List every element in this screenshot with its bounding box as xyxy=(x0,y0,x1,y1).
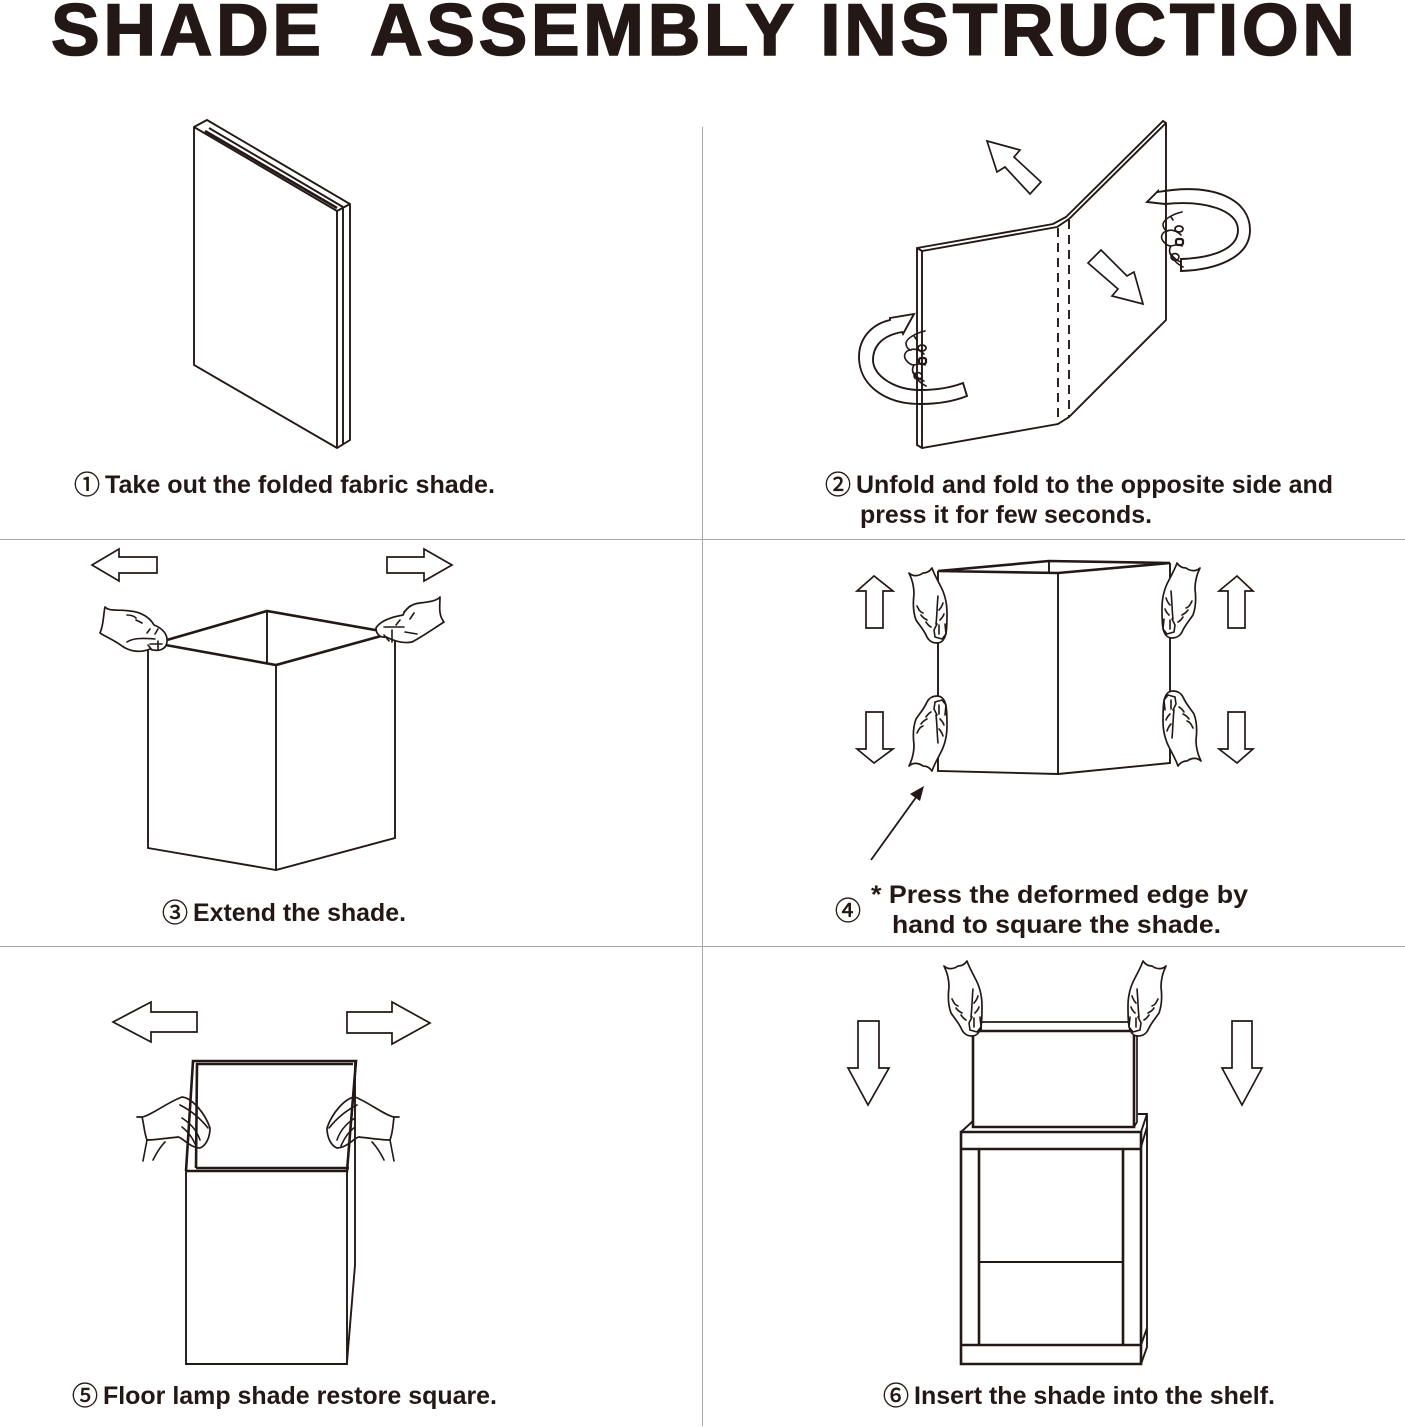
step 5 caption: ⑤ xyxy=(72,1376,98,1413)
icon: left hand xyxy=(100,607,167,651)
icon: extended shade box xyxy=(148,611,395,870)
step 1 caption xyxy=(74,465,495,502)
arrow: right xyxy=(347,1002,430,1044)
arrows: up and down xyxy=(857,576,1253,763)
step 2 caption: press it for few seconds. xyxy=(860,501,1152,529)
icon: two hands xyxy=(944,961,1166,1036)
step 6 caption: ⑥ xyxy=(883,1376,909,1413)
arrow: left xyxy=(113,1002,197,1042)
step 2 caption: Unfold and fold to the opposite side and xyxy=(856,471,1333,499)
icon: left hand xyxy=(137,1097,210,1161)
step 6 caption xyxy=(883,1376,1275,1413)
icon: shelf xyxy=(961,1114,1147,1364)
panel: step 6 xyxy=(848,961,1275,1413)
icon: fabric shade being inserted xyxy=(973,1022,1137,1127)
panel: step 1 xyxy=(74,120,495,502)
icon: right hand xyxy=(376,597,444,643)
icons: four hands xyxy=(909,563,1201,771)
icon: folded fabric shade xyxy=(194,120,350,448)
arrow: up-left xyxy=(987,141,1041,194)
step 3 caption: ③ xyxy=(162,893,188,930)
icon: left hand pinching xyxy=(905,331,926,386)
panel: step 3 xyxy=(92,549,452,930)
icon: unfolded shade panels xyxy=(917,121,1166,448)
panel: step 5 xyxy=(72,1002,497,1413)
step 4 caption: ④ xyxy=(835,891,861,928)
step 4 caption: * Press the deformed edge by xyxy=(871,881,1248,909)
step 5 caption: Floor lamp shade restore square. xyxy=(103,1382,497,1410)
arrow: pointing to deformed edge xyxy=(871,786,924,860)
step 1 caption: Take out the folded fabric shade. xyxy=(105,471,495,499)
icon: right hand pinching xyxy=(1162,212,1183,267)
step 3 caption xyxy=(162,893,406,930)
arrow: left down xyxy=(848,1021,889,1105)
icon: floor lamp shade xyxy=(186,1061,356,1364)
arrow: right rotation xyxy=(1147,189,1250,271)
icon: right hand xyxy=(327,1097,399,1161)
arrow: right xyxy=(387,549,452,581)
step 4 caption: hand to square the shade. xyxy=(892,911,1221,939)
step 2 caption: ② xyxy=(825,465,851,502)
step 3 caption: Extend the shade. xyxy=(193,899,406,927)
step 6 caption: Insert the shade into the shelf. xyxy=(914,1382,1275,1410)
arrow: left rotation xyxy=(859,314,967,404)
arrow: right down xyxy=(1222,1021,1262,1105)
icon: squared shade box xyxy=(938,561,1170,774)
step 4 caption xyxy=(835,881,1248,939)
arrow: left xyxy=(92,549,157,581)
step 2 caption xyxy=(825,465,1333,529)
arrow: down-right xyxy=(1088,250,1143,304)
panel: step 2 xyxy=(825,121,1333,529)
step 1 caption: ① xyxy=(74,465,100,502)
panel: step 4 xyxy=(835,561,1253,939)
